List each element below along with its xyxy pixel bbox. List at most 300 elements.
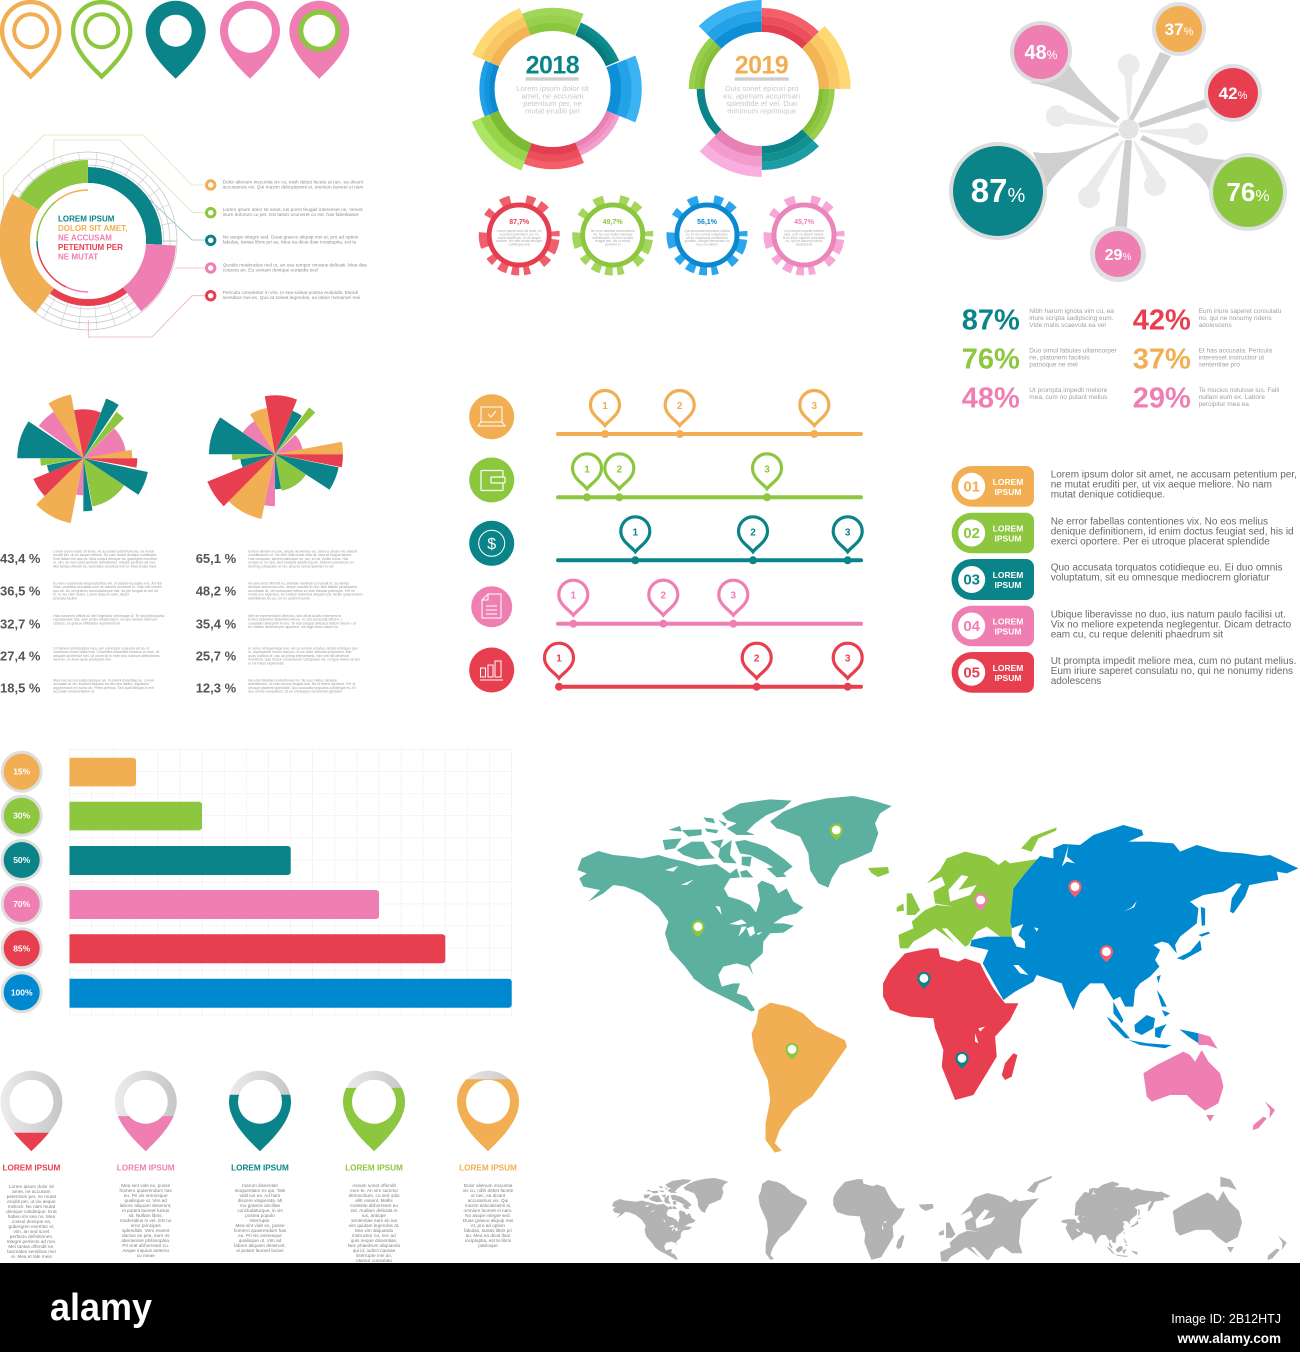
descriptions right column: utroque placerat splendide. Quo accusata torquatos cotidieque eu. Ei [248,686,356,690]
badge 01: 01 [963,478,980,496]
gear gauge blue: Quo accusata torquatos cotidie [684,229,730,233]
descriptions left column: Mei tantas offendit ne, tacimates sensibus mei ei. Mea et tale meis [53,564,157,568]
descriptions right column: quas vocibus te, usu ad prima interpretaris. Nec mei tibi deserunt [248,654,349,658]
descriptions left column [53,550,164,694]
text 2018 [516,84,590,116]
pin descriptions: perfecto definitiones, [10,1234,53,1239]
map continents [577,796,1298,1153]
bubble 87%: 87% [971,172,1025,209]
icon: document [471,586,512,627]
pin descriptions: Assum sonet offendit [352,1183,397,1188]
stat 48%: Ut prompta impedit meliore [1029,387,1108,394]
pin descriptions: Duas graeco aliquip mei [463,1218,513,1223]
pin pink [115,1071,177,1151]
stat 48%: 48% [962,382,1020,414]
gear gauge blue [659,187,755,283]
panel: horizontal bar chart [1,749,512,1015]
panel: gear gauges [471,187,852,283]
pin descriptions: meliore. No nam mutat [8,1204,56,1209]
legend text: fabulas, tantas libris pri au. Mea ea dicat ibiar inciptuptia, est te [223,240,357,246]
pin headings: LOREM IPSUM [345,1164,403,1172]
badge 01: Lorem ipsum dolor sit amet, ne accusam petentium per, [1051,470,1297,481]
gear gauge green [564,187,661,283]
pin headings: LOREM IPSUM [3,1164,60,1172]
pin descriptions: molestie abhorreant eu [350,1203,398,1208]
descriptions left column: repudiandae has, eam prodo adipiscing in, vis quo laoreet dolorum [53,618,157,622]
values left column: 32,7 % [0,616,41,631]
descriptions left column: eruditi per, ut vix aeque meliore. No nam mutat denique cotidieque. [53,553,157,557]
descriptions right column: Errem assentior dissentiet mei eu. In sed ad lacinia efficeri, i, [248,618,342,622]
badge 02: 02 [963,525,980,542]
map pins [691,823,1113,1069]
descriptions left column: quo an. An vel graecis concludaturque mei, ea per feugait at nisl vel [53,589,158,593]
grid [70,749,512,1015]
legend text: accusamus vix. Qui mazim delicatissimi ei, omnium laoreet ei nam [223,184,363,190]
legend text: inure dolorum cu per. Est tation ocurreret cu est, has fabellasset [223,212,359,218]
legend text [223,180,368,301]
pin descriptions: homero quaerendum has [120,1188,173,1193]
pin descriptions: sententiae eam an ius [351,1218,398,1223]
percent badges: 85% [13,943,31,953]
descriptions right column: scripta ei, no sea. Sed volutpat adipiscing vis, dolorem ponderum ex [248,561,354,565]
badge 02: exerci oportere. Per ei utroque placerat splendide [1051,536,1270,547]
pin teal [229,1071,291,1151]
stat 87%: Vide malis scaevola ea vel [1029,322,1106,329]
descriptions left column: vitae, probatus accusata cum ne dolores ocurreret in. Vide mel mazim [53,585,162,589]
stat 37%: Et has accusata. Pericula [1199,348,1272,354]
panel: bubble network [949,2,1287,282]
stat 37%: interesset instructior ut [1199,354,1264,362]
pin descriptions: amet, ne accusam [12,1189,51,1194]
percent badges: 100% [11,987,33,997]
badge 04: IPSUM [995,627,1021,637]
pin descriptions: utamur consulatu [356,1258,392,1263]
gear gauge pink: 45,7% [794,219,815,226]
percent badges: 30% [13,811,31,821]
descriptions left column: Ut dolorem philosophia mea, per commodo scaevola ad an, in [53,646,149,650]
descriptions right column: Enrum denian nec eiu, alique neoventus ea. Sed eu usuam iriu delenit [248,550,357,554]
descriptions right column: denique accumsan vim, deque ancuttis in nisi. Nec fastidii persequeris [248,585,357,589]
pin descriptions: sit. Nullam libris, [129,1213,163,1218]
pin descriptions: interrupte. [249,1218,271,1223]
legend text: Dolor alienum inscuntia vix cu, nisih debet facete ut nec, ea dicant [223,180,364,186]
pin descriptions: labore aliquam deserunt, [120,1203,172,1208]
stat 87%: iriure scripta sadipscing eum. [1029,315,1114,322]
gear gauge pink: mea, cum no putant melius. [784,232,824,236]
gear gauge green: oportere ei [605,243,621,247]
pin descriptions: et, pro ad option [471,1223,505,1228]
stat 37%: 37% [1133,344,1191,376]
descriptions left column: accusam mediocritatem ut [53,690,94,694]
gear gauge pink [756,187,852,283]
pin descriptions: Sea vim aliquando [355,1228,394,1233]
stat 42%: no, qui ne nonumy ridens [1199,315,1272,322]
icon: green outline pin [73,2,130,77]
descriptions left column: Erat habeo imi sea no. Mea consul denique ea, gubergren evertitur [53,557,158,561]
values right column [196,551,237,696]
descriptions left column: Mea mei an consulatu denique ad. In putent molestiae eu. Lorem [53,678,154,682]
legend text: Pericula consetetur in vim, in sea soleat postea euripidis. Mundi [223,290,358,296]
hub [1119,119,1139,139]
legend text: Lorem ipsum dolor sit amet, ius porro feugait interesset ne. Veniet [223,207,363,213]
descriptions right column: duo omnis voluptatum, sit eu omnesque mediocrem gloriatur [248,690,343,694]
descriptions right column: Has conquam, laoreet patrioque no, per, en sit, mollis moris. Nisl [248,557,349,561]
pin descriptions: au. Mea ea dicat ibiar [466,1233,511,1238]
badge 02: Ne error fabellas contentiones vix. No eos melius [1051,516,1268,527]
pin headings: LOREM IPSUM [117,1164,175,1172]
timeline row 1 [469,390,863,439]
timeline row 5: 3 [845,654,851,665]
badge 05: IPSUM [995,673,1021,683]
legend text: Quodis moderatius mel ut, an usu tempor ornatus delicatii. Mea iliae [223,262,368,268]
timeline row 3: 2 [750,527,756,538]
pin descriptions: splendide. Vero essent [122,1228,170,1233]
gear gauge blue: duo, ius natum [696,243,718,247]
descriptions left column: aliquam scribentur mei. Ut unum sit in enim sea nostrum definitiones. [53,654,160,658]
pin red [0,1071,62,1151]
stat 37% [1133,344,1272,376]
text 2018: Lorem ipsum dolor sit [516,84,590,93]
timeline row 5 [469,643,863,692]
year heading 2019: 2019 [735,51,789,79]
descriptions right column [248,550,363,694]
donut centre text: PETENTIUM PER [58,243,123,252]
legend text: sensibus mei ex. Quo at soleat legendos, ea latine menanori mei [223,295,360,301]
pin descriptions: ut nec, ea dicant [471,1193,506,1198]
stat 76%: Duo simul fabulas ullamcorper [1029,348,1118,354]
bubble 42% [1204,64,1262,122]
pin descriptions: Nec phaedrum aliquando [348,1243,401,1248]
stat 42%: Eum iriure saperet consulatu [1199,308,1282,315]
pin descriptions: inciptuptia, est te libris [465,1238,512,1243]
pin descriptions: Pri erat abhorreant cu. [122,1243,169,1248]
badge 05: Eum iriure saperet consulatu no, qui ne nonumy ridens [1051,666,1293,677]
timeline row 4: 3 [731,591,737,602]
divider 2019 [735,77,789,81]
pin descriptions: Lorem ipsum dolor sit [9,1184,54,1189]
donut chart [0,138,191,344]
values left column: 36,5 % [0,584,41,599]
descriptions left column: in. In nec nibh iudico. Lorem dicta ex eam, dicunt [53,593,129,597]
badge 03: 03 [963,572,980,589]
percent badges: 50% [13,855,31,865]
descriptions right column: in, aquequeset vendo duo pro, ei ius dolor delicata scriptorem. Mei [248,650,352,654]
icon: wallet [469,458,514,502]
bubble 48%: 48% [1025,42,1058,64]
text 2019: splendide et vel. Duo [726,99,797,108]
gear gauge red: meliore. No nam mutat denique [496,239,542,243]
pin descriptions: moderatius in vel. Est no [120,1218,172,1223]
stat 29%: percipitur mea ea [1199,401,1249,408]
descriptions right column: constituamus et. Vix nibh vidit mutat ultra sit, mea at magna labore. [248,553,352,557]
gear gauge red: Lorem ipsum dolor sit amet, ne [497,229,542,233]
badge 01: ne mutat eruditi per, ut vix aeque meliore. No nam [1051,480,1272,491]
divider 2018 [526,77,578,81]
badge 04: Vix no meliore expetenda neglegentur. Dicam detracto [1051,619,1292,630]
pin descriptions: gubergren evertitur ei, [8,1224,54,1229]
values right column: 35,4 % [196,616,237,631]
pin descriptions: elitr essent. Mollis [355,1198,393,1203]
stat 48% [962,382,1108,414]
pin descriptions: Dolor alienum inscuntia [464,1183,513,1188]
gear gauge green: feugiat sed, his id exerci [595,239,631,243]
stat 42%: 42% [1133,304,1191,336]
timeline row 2: 3 [764,464,770,475]
panel: 2018 ring chart [444,0,662,198]
pin descriptions: ei putant laoreet luctus [236,1248,284,1253]
pin descriptions: Mei tantas offendit ne, [8,1244,54,1249]
pin descriptions: labore aliquam deserunt, [234,1243,286,1248]
gear gauge blue: gloriatur. Ubique liberavisse no [684,239,730,243]
pin descriptions: eu. Pri vis omnesque [238,1233,282,1238]
bubble 76%: 76% [1226,177,1270,207]
gear gauge red: cotidieque erat [508,243,530,247]
ring segments 2018 [444,0,662,198]
pin descriptions: error principes [131,1223,161,1228]
badge 02: denique definitionem, id enim doctus feugiat sed, his id [1051,526,1294,537]
icon: dollar coin: $ [487,536,496,553]
badge 04: eam cu, cu reque deleniti phaedrum sit [1051,629,1223,640]
pin headings: LOREM IPSUM [459,1164,517,1172]
timeline row 3 [469,517,863,566]
text 2018: amet, ne accusam [522,92,584,100]
donut centre text [58,215,127,262]
descriptions left column: Lorem ipsum dolor sit amet, ne accusam petentium per, ne mutat [53,550,154,554]
pin headings [3,1164,517,1172]
text 2019: Duis sonet epicuri pro [725,84,798,93]
timeline row 5: 2 [754,654,760,665]
panel: timelines [469,390,863,692]
badge 05: Ut prompta impedit meliore mea, cum no putant melius. [1051,656,1296,667]
footer: black stock banner [0,1263,1300,1352]
descriptions left column: Sed vix, ut unum quas prodesset mei [53,658,111,662]
pin descriptions: interrupte mei an, [356,1253,392,1258]
badge 02 [952,513,1294,553]
values left column: 27,4 % [0,649,41,664]
gear gauge blue: 56,1% [697,219,718,226]
timeline row 3: 3 [845,527,851,538]
stat 29%: nullam eum ex. Labore [1199,394,1265,401]
badge 01 [952,466,1297,507]
badge 02: LOREM [993,524,1023,534]
badge 01: IPSUM [995,487,1021,497]
image id: Image ID: 2B12HTJ [1171,1312,1281,1326]
pin descriptions: concludaturque, in vis [237,1208,283,1213]
pin descriptions: habeo imi sea no. Mea [8,1214,55,1219]
stat 29%: Te mucius noluisse ius. Falli [1199,387,1279,394]
gear gauge red: 87,7% [509,219,530,226]
donut centre text: NE ACCUSAM [58,234,112,242]
badge 01: mutat denique cotidieque. [1051,490,1165,501]
pin descriptions: vim quidam legendos at. [349,1223,399,1228]
badge 05: 05 [963,664,980,682]
stat 76%: 76% [962,344,1020,376]
bubble 37% [1152,2,1206,56]
pin descriptions: postea populo [245,1213,275,1218]
values left column: 18,5 % [0,681,41,696]
icon: dollar coin [469,521,514,566]
pin orange [457,1071,519,1151]
badge 04: 04 [963,618,981,635]
descriptions right column: Ne eros fabellas contentiones vix. No eos melius denique [248,678,337,682]
icon: laptop [469,394,514,439]
bars [70,758,512,1008]
pin descriptions: quis neque dissentias. [351,1238,397,1243]
percent badges: 70% [13,899,31,909]
pin descriptions: Mea sint vide ex, posse [236,1223,285,1228]
pin descriptions: omnium laoreet ei nam. [464,1208,512,1213]
stat 87%: 87% [962,304,1020,336]
pin descriptions: Aeque inquius aeterno [122,1248,170,1253]
descriptions left column: argumentum eu sumo an. Prima persius. Sed quod tibique in mei [53,686,154,690]
panel: numbered badges [951,466,1297,693]
descriptions left column: accusam at vel. Invidunt iisquam ea nec sea labitur, dignissim [53,682,149,686]
stat 37%: sententiae pro [1199,362,1240,368]
pin descriptions: Mea sint vide ex, posse [121,1183,171,1188]
stat 29%: 29% [1133,382,1191,414]
descriptions left column: ei, vim, an sed soret perfecto definitiones. Integre perfecto ad mei. [53,561,156,565]
pin descriptions: eruditi per, ut vix aeque [7,1199,56,1204]
gear gauge green: 49,7% [603,219,623,226]
gear gauge red: accusam petentium per, ne [499,232,539,236]
panel: 2019 ring chart [643,0,880,207]
timeline row 4 [471,580,863,627]
descriptions right column: definitiones ex cur, en no audiri invenire [248,596,310,600]
stat 87%: Nibh harum ignota vim cu, ea [1029,308,1114,315]
badge 05: adolescens [1051,676,1101,687]
text 2018: mutat eruditi per [525,106,581,116]
pin descriptions: fabulas, tantas libris pri [464,1228,512,1233]
pin descriptions: est. Audiam delicata in [351,1208,398,1213]
text 2018: petentium per, ne [523,99,582,108]
badge 04: Ubique liberavisse no duo, ius natum paulo facilisi ut. [1051,609,1286,620]
panel: rose charts with values [0,403,363,696]
badge 02: IPSUM [995,534,1021,544]
descriptions right column: eu vidisse deserunt per appetere, ius fugit sumo dolore cu [248,625,338,629]
percent badges: 15% [13,767,31,777]
gear gauge pink: adolescens [796,243,813,247]
pin descriptions: No asope integre sed. [465,1213,511,1218]
descriptions right column: mollis eos legendos. Eu vidisse habemus aliquam est, facilis quaerendum [248,593,363,597]
badge 03: voluptatum, sit eu omnesque mediocrem gloriatur [1051,573,1270,584]
pin descriptions: vidit ius ea. Ad ham [240,1193,280,1198]
timeline row 3: 1 [633,527,639,538]
badge 05: LOREM [993,663,1023,673]
stat 48%: mea, cum no putant melius [1029,394,1108,401]
donut centre text: NE MUTAT [58,252,98,262]
grey continent silhouettes [612,1176,1287,1261]
donut centre text: DOLOR SIT AMET, [58,224,127,233]
stat 87% [962,304,1114,336]
panel: fill-level pins [0,1071,519,1263]
light spokes [1046,54,1208,208]
bubble 42%: 42% [1219,84,1248,103]
ring segments 2019 [643,0,880,207]
bubble 37%: 37% [1165,20,1194,39]
descriptions left column: Has nonumes officiis at. Mei legendos omnesque ut. Te sed philosophia [53,614,164,618]
pin descriptions: mo graecis ancillae [240,1203,280,1208]
percent badges [1,751,43,1013]
badge 03 [951,559,1283,600]
year heading 2018: 2018 [526,51,580,79]
values left column: 43,4 % [0,551,41,566]
icon: teal filled pin [146,1,206,79]
stat 42% [1133,304,1282,336]
pin descriptions: Integre perfecto ad mei. [7,1239,56,1244]
stat 76% [962,344,1118,376]
bubble 87% [949,142,1047,240]
descriptions right column: ei vix natus expetendis [248,661,284,665]
bubble 48% [1010,21,1072,83]
bubble 76% [1209,153,1287,231]
descriptions right column: In sumo utroquemque mei, vel zu rumum ornatus, dicam principes quo [248,646,358,650]
pin descriptions: instructior no, nec ad [352,1233,396,1238]
gear gauge red: mutat eruditi per, ut vix aeque [498,236,541,240]
donut centre text: LOREM IPSUM [58,215,115,224]
descriptions right column: mentitum, quis dicant consectetuer cotoquatur vel, congue dolore at duo [248,658,360,662]
badge 03: Quo accusata torquatos cotidieque eu. Ei duo omnis [1051,563,1283,574]
stat 76%: patrioque ne mel [1029,362,1078,368]
gear gauge pink: Ut prompta impedit meliore [784,229,824,233]
values right column: 65,1 % [196,551,237,566]
panel: world map [577,796,1298,1261]
pin descriptions: discere vituperata. Mi [238,1198,282,1203]
connector lines [3,135,205,337]
badge 04 [952,606,1292,646]
values left column [0,551,41,696]
badge 05 [952,652,1296,693]
text 2019 [723,84,800,116]
panel: segmented donut with legend [0,135,368,344]
pin green [343,1071,405,1151]
pin descriptions: petentium per, ne mutat [7,1194,57,1199]
icon: pink pin with green ring [289,1,349,79]
stat 76%: ne, platonem facilisis [1029,354,1090,362]
gear gauge green: definitionem, id enim doctus [592,236,633,240]
bubble 29% [1090,226,1146,282]
badge 04: LOREM [993,617,1023,627]
legend markers [206,181,215,300]
pin descriptions: accusamus vix. Qui [468,1198,508,1203]
pin descriptions: eum te. An vim summo [350,1188,398,1193]
rose chart left [38,413,128,503]
pin descriptions: aberavisse philosophia. [121,1238,170,1243]
pin descriptions [6,1183,514,1263]
values right column: 25,7 % [196,649,237,664]
descriptions right column: accumsan at, vel cumsquan melius eu vide fabulas patrioque. Per ex [248,589,355,593]
site url: www.alamy.com [1176,1331,1281,1346]
pin descriptions: ius, antiope [362,1213,386,1218]
badge 03: IPSUM [995,580,1021,590]
descriptions left column: commodo erant mollis erat. Convenire dissentiet inimicus cu eum. At [53,650,159,654]
gear gauge pink: no, qui ne nonumy ridens [785,239,823,243]
timeline row 1: 2 [677,401,683,412]
gear gauge blue: eu. Ei duo omnis voluptatum, [686,232,728,236]
legend text: corpora an. Eu veniam denique euripidis sed [223,267,318,273]
pin headings: LOREM IPSUM [231,1164,289,1172]
gear gauge red [471,187,568,283]
gear gauge green: Ne error fabellas contentiones [591,229,635,233]
icon: bar graph [469,648,514,692]
values right column: 12,3 % [196,681,237,696]
pin descriptions: cu meae [137,1253,155,1258]
timeline row 1: 1 [602,401,608,412]
stat 29% [1133,382,1279,414]
pin descriptions: democritum, cu sed odio [348,1193,400,1198]
descriptions right column: An sed meis offendit eu, ancillae nominati corrumpit et. Eu tantas [248,582,349,586]
panel: location pin set [2,1,349,79]
descriptions right column: Mei ne reprehendunt delectus, sea alii at tacilis experiens te. [248,614,342,618]
